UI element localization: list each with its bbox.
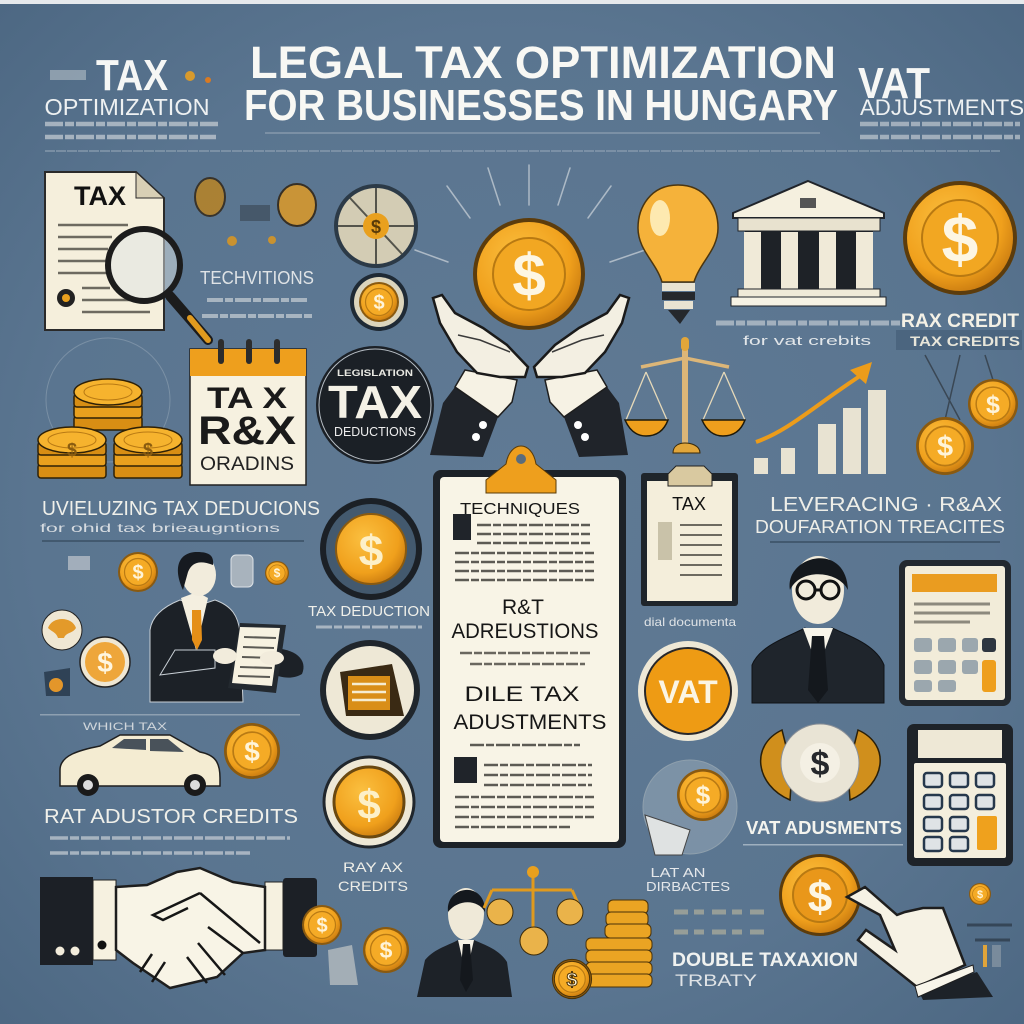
icon: right side laurel medallion: $: [811, 745, 830, 783]
text block: vat credits caption: for vat crebits: [743, 333, 872, 348]
icon: pie dial: [334, 184, 418, 268]
text block: lat treaties: LAT AN: [650, 865, 706, 880]
heading: rat adjustments: R&T: [502, 596, 544, 619]
text block: double taxation treaty: TRBATY: [675, 971, 757, 990]
icon: tax clipboard: TAX: [672, 494, 706, 514]
text block: rat adjustor credits: [44, 806, 298, 853]
text block: techniques label: [200, 268, 314, 316]
icon: right side laurel medallion: [761, 724, 880, 802]
text block: lat treaties: [646, 865, 730, 894]
heading: rat adjustments: [452, 596, 598, 643]
header: tax optimization: OPTIMIZATION: [44, 94, 210, 120]
icon: tax document with magnifier: [45, 172, 208, 340]
header: vat adjustments: ADJUSTMENTS: [860, 95, 1024, 120]
header: tax optimization: TAX: [96, 51, 168, 100]
text block: double taxation treaty: DOUBLE TAXAXION: [672, 950, 858, 971]
icon: coin badge mid: [320, 498, 422, 600]
icon: tax document with magnifier: TAX: [74, 181, 126, 211]
title divider: [45, 133, 1000, 151]
panel: calculator: [907, 724, 1013, 866]
text block: ray ax credits: CREDITS: [338, 878, 408, 894]
icon: coin tower: [552, 900, 652, 999]
icon: hand pressing coin: [779, 854, 993, 1000]
icon: coin with ring: [324, 757, 414, 847]
icon: businessman with document: [150, 552, 304, 702]
text block: utilizing tax deductions: for ohid tax brieaugntions: [40, 521, 280, 535]
heading: techniques: TECHNIQUES: [460, 501, 580, 518]
icon: light bulb: [638, 185, 718, 324]
icon: tax calendar: TA X: [207, 382, 287, 415]
text lines: lower: [455, 745, 594, 827]
text block: leveraging treaties: DOUFARATION TREACITES: [755, 517, 1005, 537]
header: tax optimization: [44, 51, 218, 137]
title: FOR BUSINESSES IN HUNGARY: [244, 81, 838, 130]
heading: dile tax adjustments: [454, 683, 606, 734]
text block: leveraging treaties: [755, 494, 1005, 543]
icon: tax clipboard: [641, 466, 738, 606]
text block: double taxation treaty: [672, 912, 858, 990]
icon: balance with coins: [484, 866, 583, 955]
text block: vat adjustment: VAT ADUSMENTS: [746, 818, 902, 838]
icon: coins near handshake: [302, 905, 409, 985]
icon: scales of justice: [625, 337, 745, 453]
title: LEGAL TAX OPTIMIZATION: [250, 37, 836, 88]
text block: clipboard caption: dial documenta: [644, 615, 736, 629]
text block: lat treaties: DIRBACTES: [646, 879, 730, 894]
icon: tax calendar: [190, 339, 306, 485]
text block: tax credits: TAX CREDITS: [910, 333, 1020, 349]
icon: hand pressing coin: $: [808, 873, 832, 922]
icon: globe and coin: [643, 760, 737, 855]
icon: car and coin: [60, 723, 280, 796]
heading: rat adjustments: ADREUSTIONS: [452, 620, 598, 643]
icon: tax calendar: R&X: [198, 409, 296, 453]
text block: utilizing tax deductions: [40, 498, 320, 542]
icon: coin with ring: $: [357, 781, 381, 828]
icon: bullet bottom: [454, 757, 477, 783]
text block: techniques label: TECHVITIONS: [200, 268, 314, 288]
text block: utilizing tax deductions: UVIELUZING TAX DEDUCIONS: [42, 498, 320, 520]
icon: analyst with glasses: [752, 556, 884, 703]
icon: tax deductions badge: [316, 346, 434, 464]
icon: radiant coin: $: [512, 242, 546, 309]
icon: tax deductions badge: LEGISLATION: [337, 368, 413, 378]
icon: small right coins: [967, 883, 1012, 967]
icon: small coins left: $: [97, 647, 113, 678]
title: [244, 37, 838, 130]
text block: tax deduction: TAX DEDUCTION: [308, 603, 430, 620]
header: vat adjustments: [858, 59, 1024, 137]
icon: coin stacks: $: [67, 440, 77, 460]
header: vat adjustments: VAT: [858, 59, 930, 108]
text block: tax credits: RAX CREDIT: [901, 311, 1019, 332]
icon: tax deductions badge: DEDUCTIONS: [334, 424, 416, 439]
icon: handshake: [40, 868, 317, 988]
heading: dile tax adjustments: ADUSTMENTS: [454, 711, 606, 734]
icon: bank building: [731, 181, 886, 306]
icon: tax calendar: ORADINS: [200, 454, 294, 475]
icon: tax deductions badge: TAX: [328, 376, 422, 428]
icon: large coin right: $: [942, 202, 978, 276]
panel: tablet calculator: [899, 560, 1011, 706]
text block: rat adjustor credits: RAT ADUSTOR CREDITS: [44, 806, 298, 828]
icon: vat badge: VAT: [658, 674, 718, 710]
text block: tax credits: [896, 311, 1022, 350]
text block: leveraging treaties: LEVERACING · R&AX: [770, 494, 1002, 516]
icon: coin badge mid: $: [359, 527, 383, 576]
heading: dile tax adjustments: DILE TAX: [464, 683, 580, 706]
icon: document badge: [320, 640, 420, 740]
text block: ray ax credits: [338, 859, 408, 894]
text lines: upper: [455, 525, 594, 580]
icon: small gold cluster: [195, 178, 316, 246]
chart: rising bars: [754, 362, 886, 474]
icon: bullet top: [453, 514, 471, 540]
icon: vat badge: [638, 641, 738, 741]
text block: label above car: WHICH TAX: [83, 721, 168, 733]
icon: large coin right: [903, 181, 1017, 295]
text block: ray ax credits: RAY AX: [343, 859, 404, 875]
icon: radiant coin: [415, 165, 645, 330]
panel: central clipboard: [433, 446, 626, 848]
text lines: middle: [460, 653, 590, 664]
icon: hanging coins: [916, 355, 1018, 475]
icon: small coin badge: [350, 273, 408, 331]
icon: businessman with balance: [417, 888, 512, 997]
icon: coin stacks: [38, 338, 182, 478]
icon: open hands: [430, 295, 629, 457]
icon: small coins left: [42, 552, 289, 696]
icon: coin stacks: $: [143, 440, 153, 460]
icon: pie dial: $: [371, 217, 381, 237]
